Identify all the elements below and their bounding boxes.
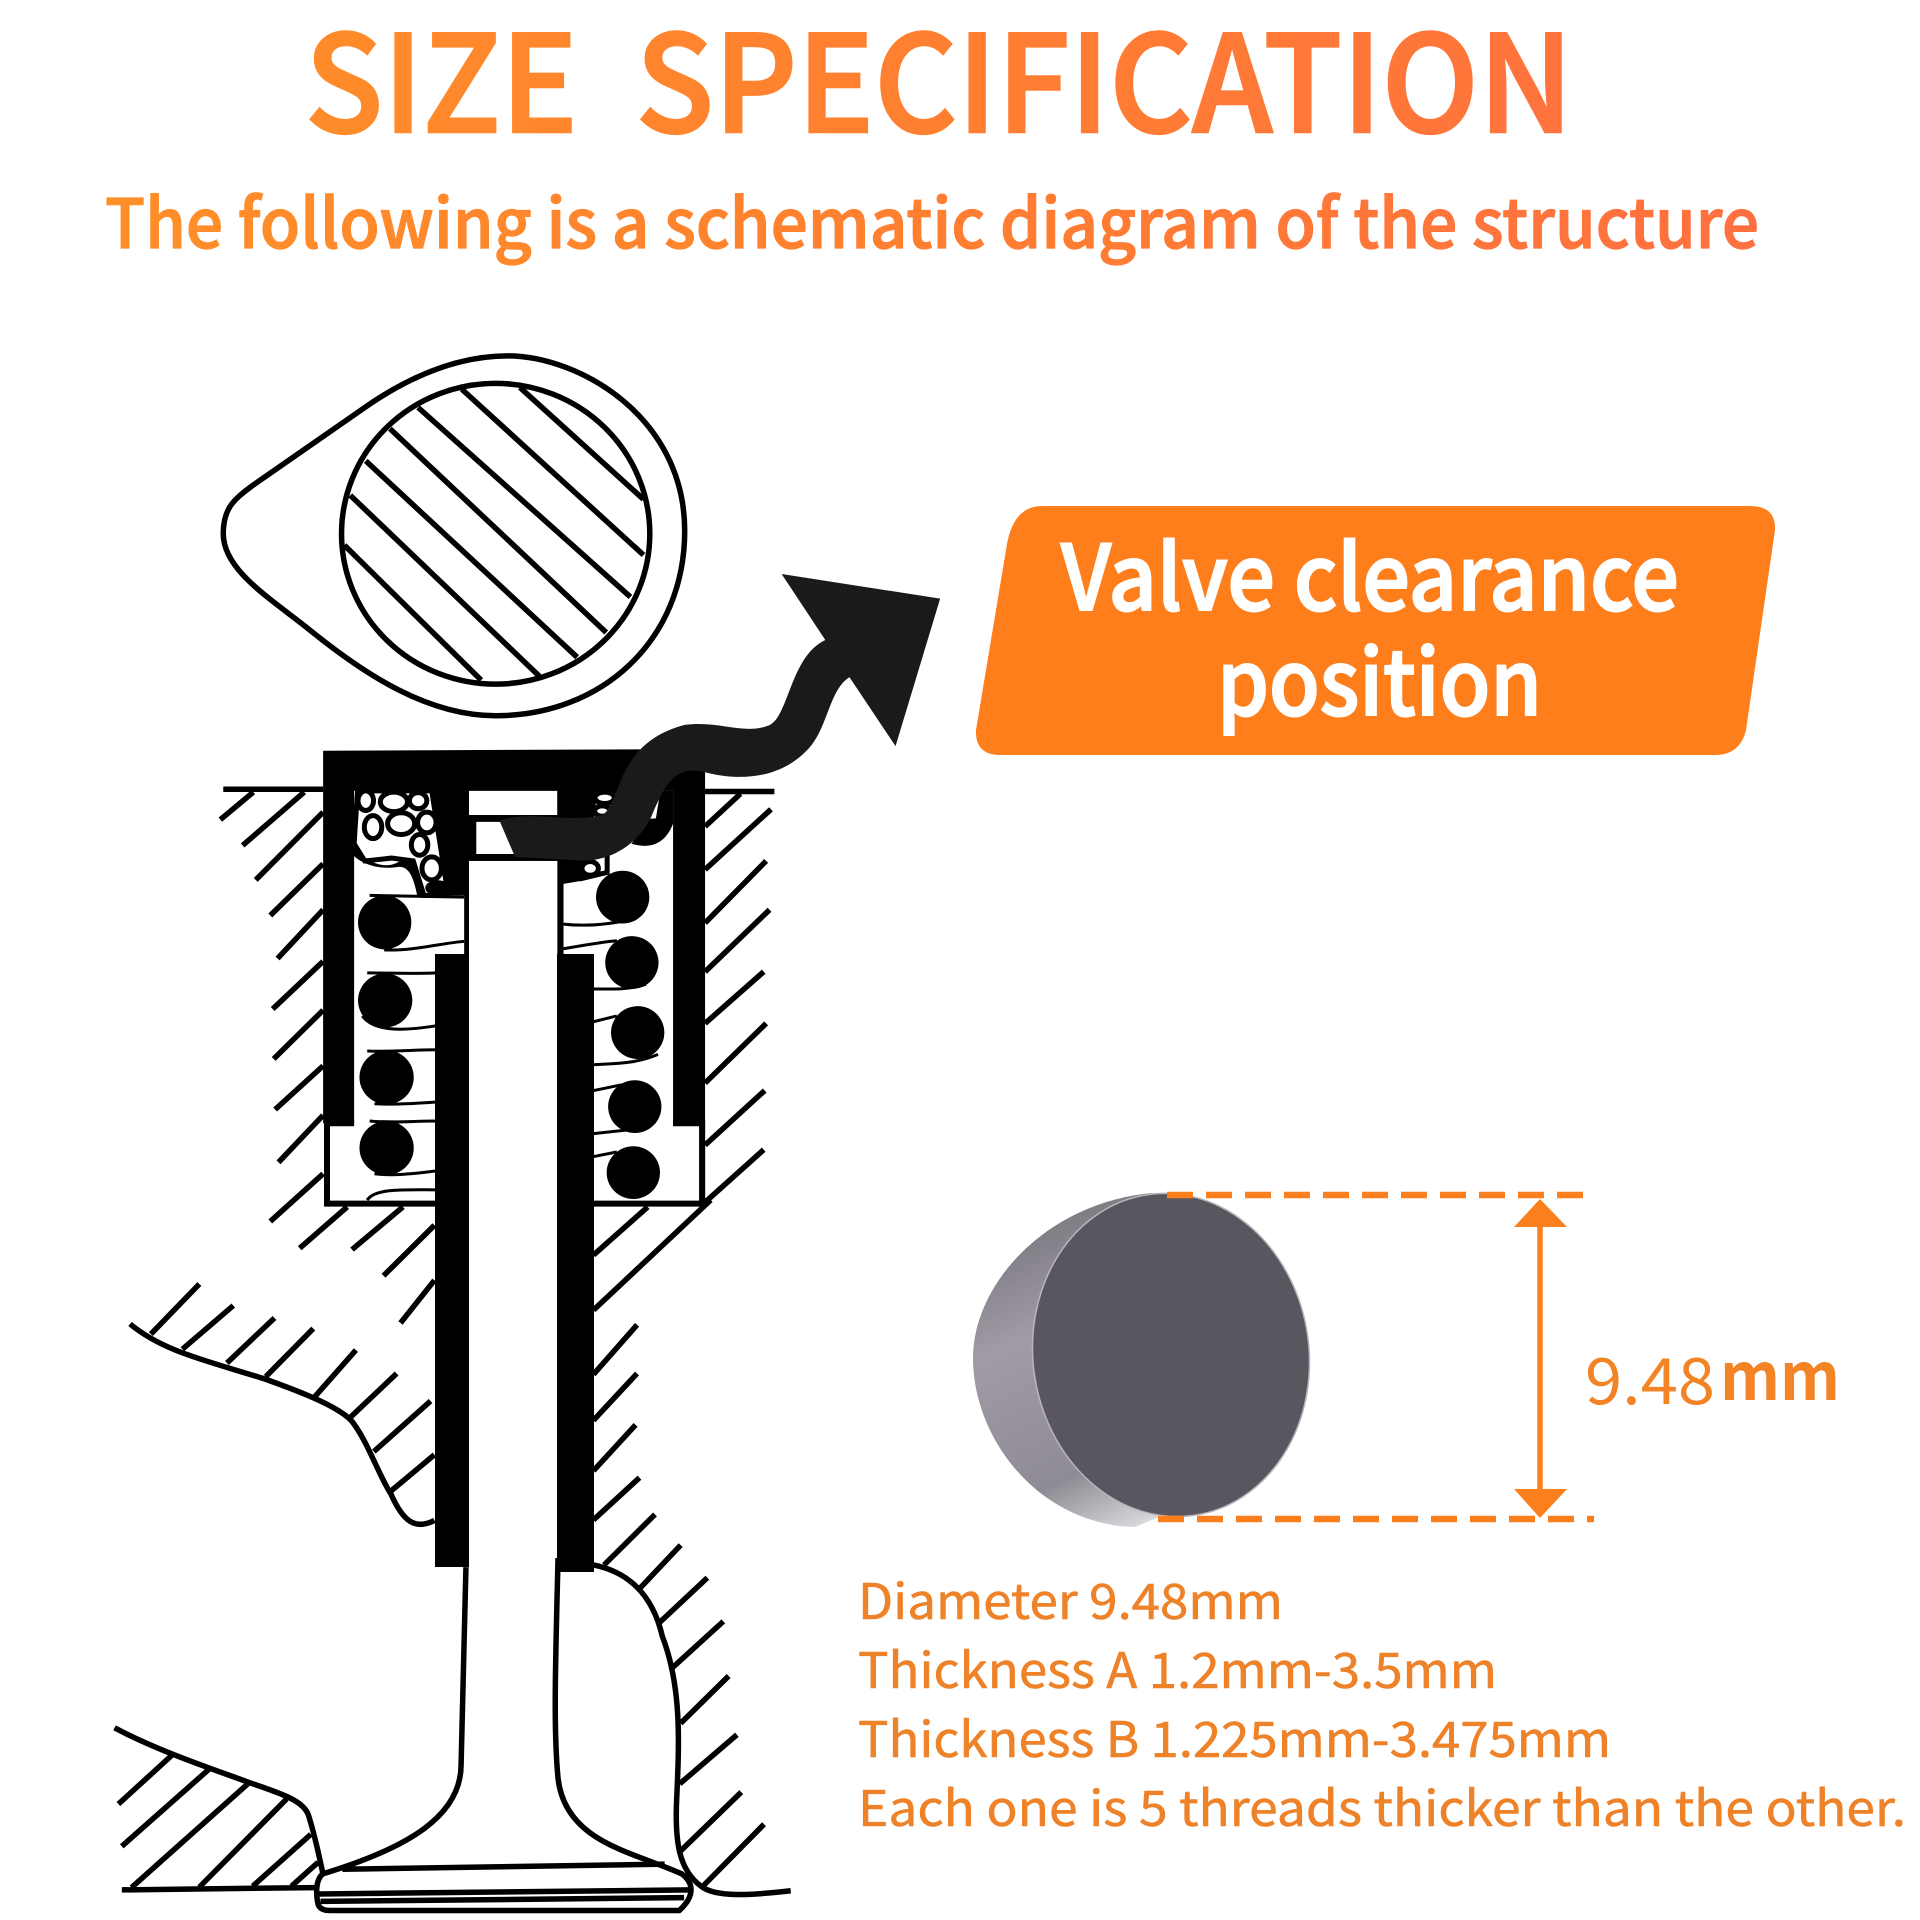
specification text: Each one is 5 threads thicker than the other. bbox=[858, 1770, 1906, 1841]
dimension label: 9.48 bbox=[1585, 1331, 1715, 1423]
callout: valve clearance position: Valve clearance bbox=[1060, 506, 1679, 636]
arrow: clearance pointer bbox=[500, 574, 940, 861]
specification text: Diameter 9.48mm bbox=[858, 1563, 1283, 1634]
diagram: valve guide bbox=[435, 954, 594, 1572]
specification text bbox=[858, 1563, 1906, 1841]
diagram: tappet, spring and upper head bbox=[220, 749, 774, 1228]
callout: valve clearance position: position bbox=[1217, 611, 1542, 741]
dimension: dashed guides and arrow bbox=[1158, 1195, 1594, 1519]
subtitle: The following is a schematic diagram of the structure bbox=[105, 169, 1759, 268]
callout: valve clearance position bbox=[976, 506, 1775, 755]
diagram: valve and lower head bbox=[115, 1200, 791, 1911]
specification text: Thickness A 1.2mm-3.5mm bbox=[858, 1632, 1497, 1703]
dimension label bbox=[1585, 1324, 1840, 1423]
shim disc bbox=[973, 1175, 1330, 1535]
dimension label: mm bbox=[1720, 1324, 1840, 1420]
specification text: Thickness B 1.225mm-3.475mm bbox=[858, 1701, 1611, 1772]
diagram: cam bbox=[223, 356, 685, 716]
